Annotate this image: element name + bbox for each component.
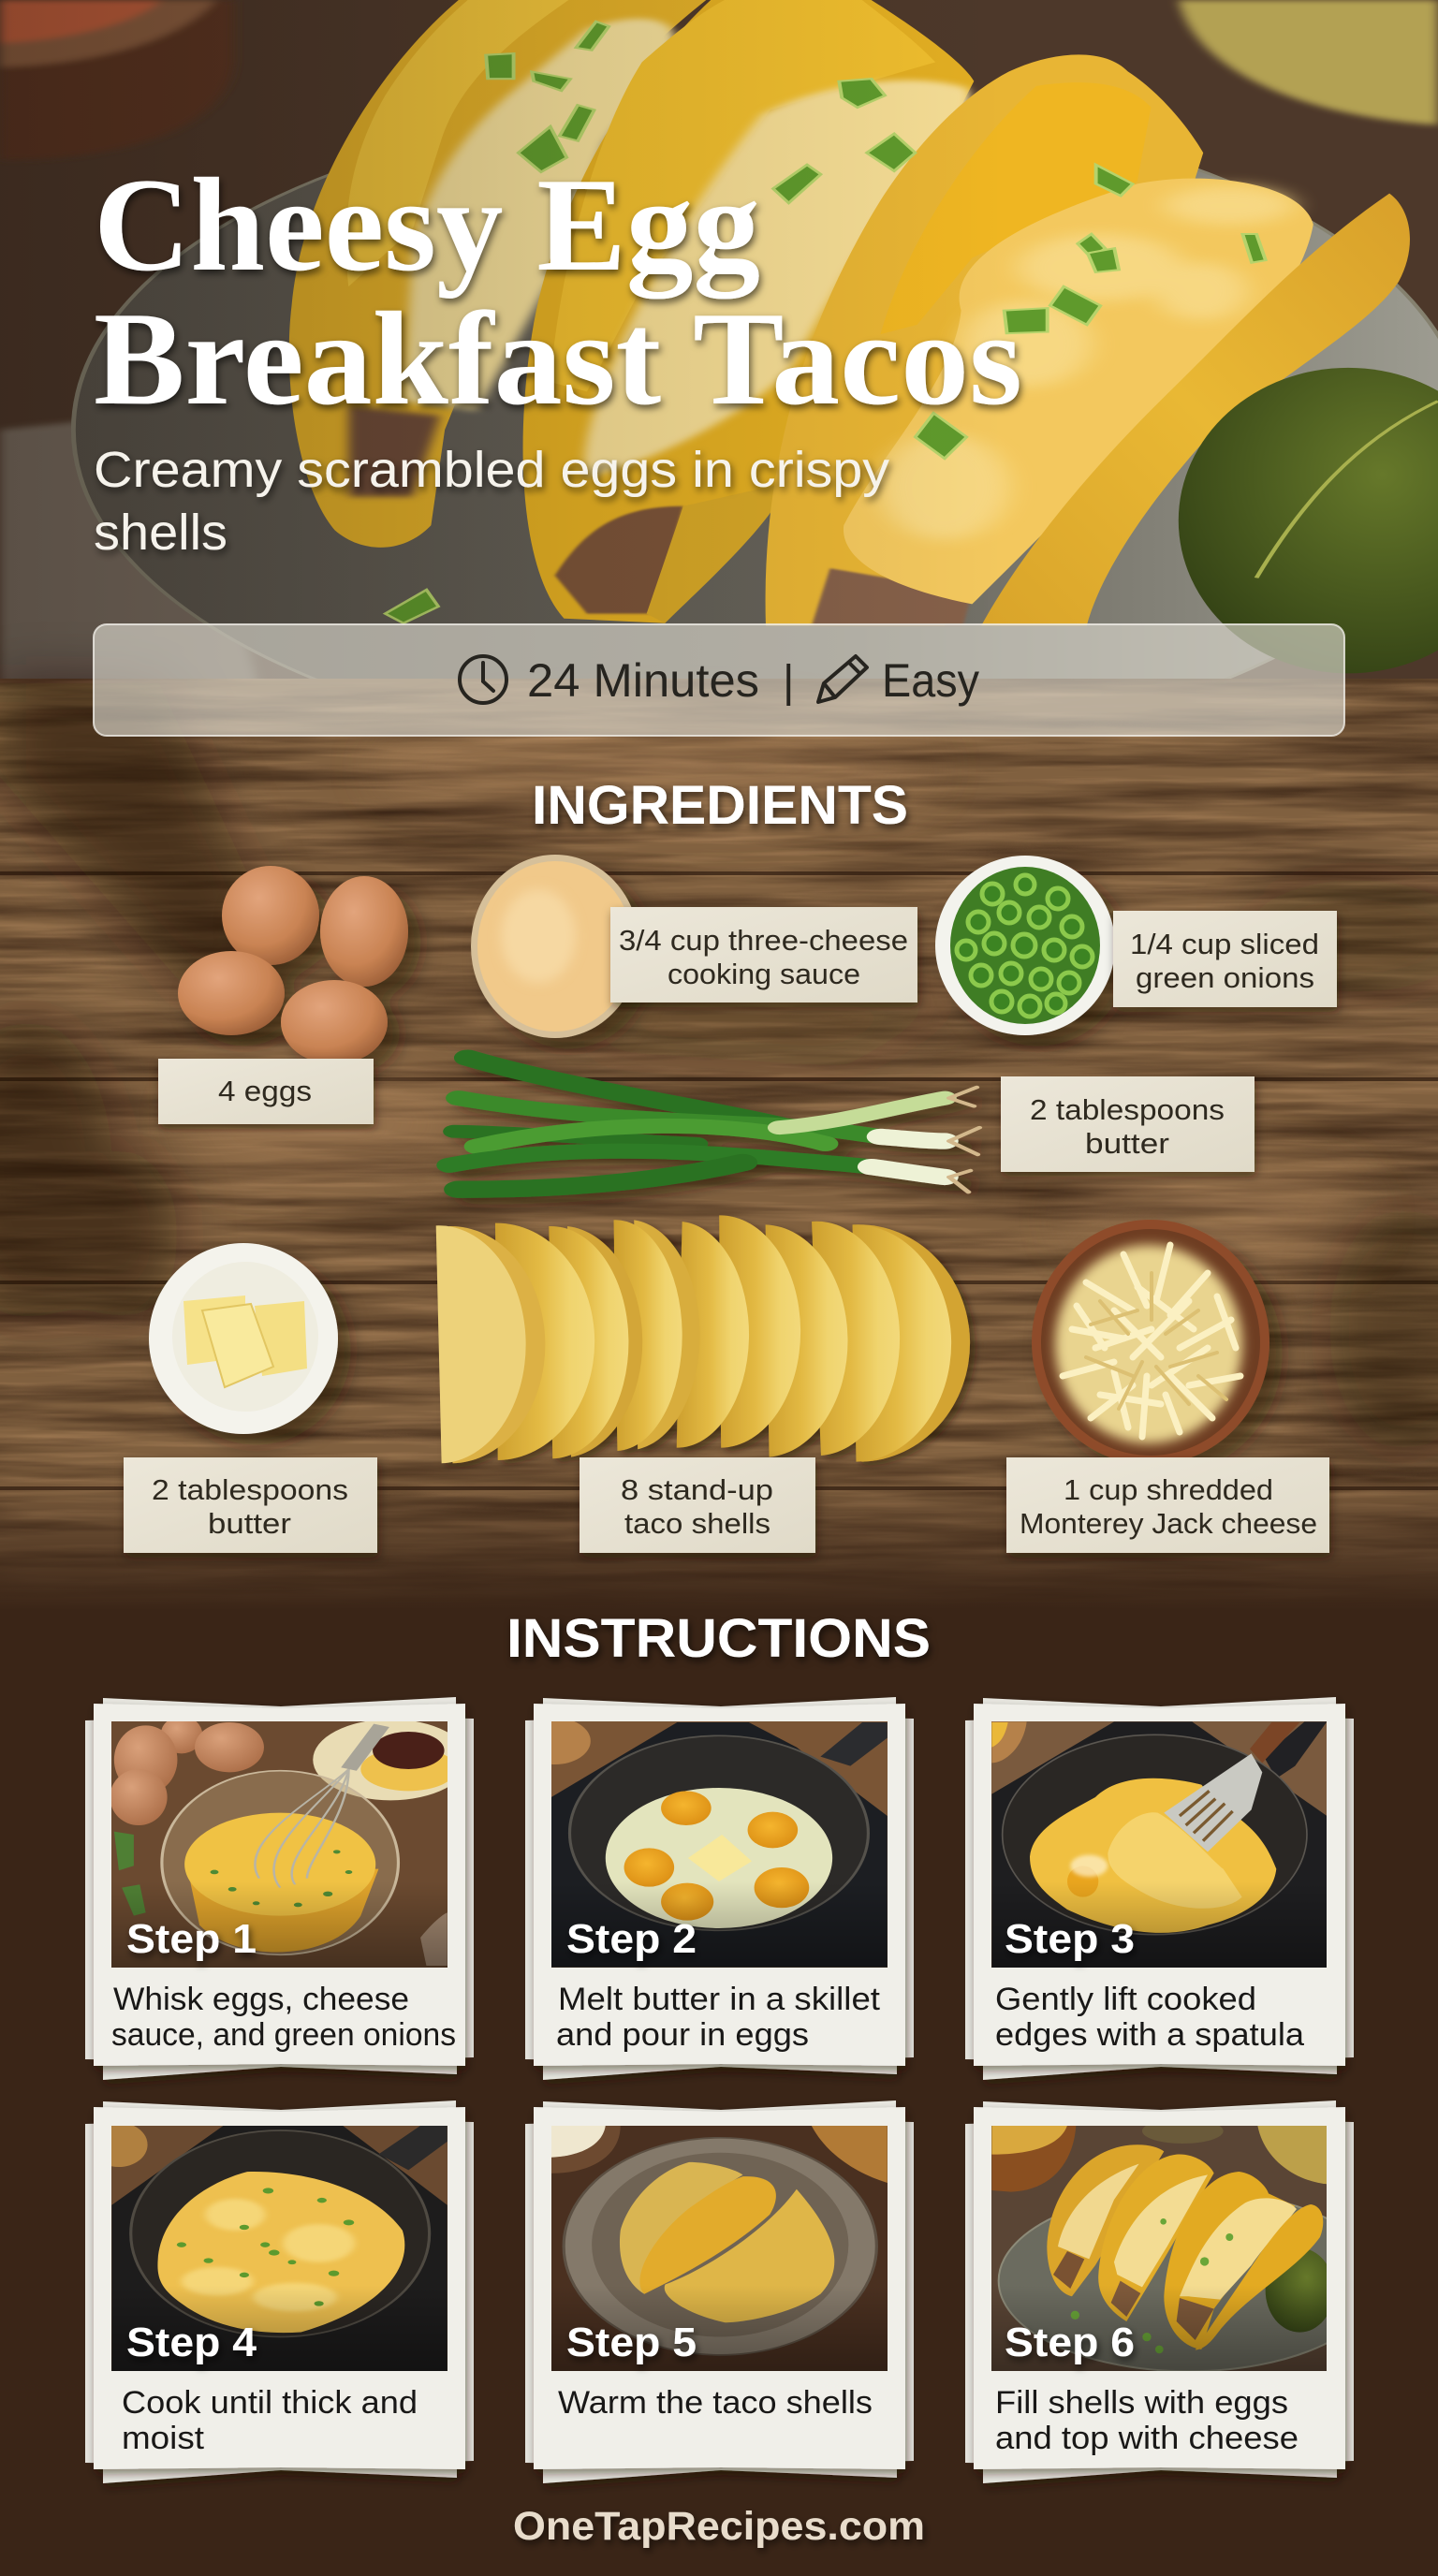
label: taco shells: taco shells xyxy=(624,1507,770,1540)
step description: Whisk eggs, cheese xyxy=(113,1982,409,2017)
step description: Melt butter in a skillet xyxy=(558,1982,881,2017)
icon: middle taco xyxy=(523,0,974,623)
wood table xyxy=(0,679,1438,1628)
label: butter lower xyxy=(124,1457,377,1553)
photo: filled tacos on plate xyxy=(991,2118,1379,2371)
step description xyxy=(995,1982,1304,2053)
left shading over hero xyxy=(0,0,854,679)
step label: Step 3 xyxy=(1005,1916,1135,1962)
step description: edges with a spatula xyxy=(995,2017,1304,2053)
title xyxy=(94,151,1022,432)
heading: instructions: INSTRUCTIONS xyxy=(506,1608,931,1669)
step description xyxy=(995,2385,1299,2456)
footer website: OneTapRecipes.com xyxy=(513,2504,925,2549)
label: eggs xyxy=(158,1059,374,1124)
step description: Gently lift cooked xyxy=(995,1982,1256,2017)
step description xyxy=(122,2385,418,2456)
separator: | xyxy=(783,657,794,707)
icon: stack of taco shells xyxy=(436,1215,970,1463)
icon: grey plate xyxy=(71,168,1438,679)
photo: thick scrambled eggs in skillet xyxy=(90,2123,448,2372)
label: cheese sauce: cooking sauce xyxy=(668,958,860,990)
label: green onions: green onions xyxy=(1136,961,1314,994)
subtitle: Creamy scrambled eggs in crispy xyxy=(94,442,889,498)
step card 4 xyxy=(85,2100,474,2483)
label: butter lower: butter xyxy=(208,1507,291,1540)
step description xyxy=(556,1982,881,2053)
label: green onions xyxy=(1113,911,1337,1007)
icon: lime xyxy=(1179,368,1438,673)
title: Cheesy Egg xyxy=(94,151,760,300)
label: butter upper xyxy=(1001,1076,1255,1172)
label: butter lower: 2 tablespoons xyxy=(152,1473,348,1506)
step description xyxy=(111,1982,456,2053)
hero photo: tacos on plate xyxy=(0,0,1438,679)
icon: eggs xyxy=(178,866,408,1064)
wood shadows and light xyxy=(0,683,1438,1451)
label: cheese sauce: 3/4 cup three-cheese xyxy=(619,924,908,957)
label: cheese xyxy=(1006,1457,1329,1553)
step description: and pour in eggs xyxy=(556,2017,809,2053)
plank seams xyxy=(0,873,1438,1488)
label: cheese: Monterey Jack cheese xyxy=(1020,1507,1317,1540)
icon: pencil xyxy=(818,656,867,702)
subtitle xyxy=(94,442,889,561)
step label: Step 2 xyxy=(566,1916,697,1962)
icon: back taco xyxy=(289,0,706,548)
photo: butter and eggs in skillet xyxy=(519,1718,888,1968)
icon: green onion flakes xyxy=(385,22,1266,623)
step description: Cook until thick and xyxy=(122,2385,418,2421)
step description: Fill shells with eggs xyxy=(995,2385,1288,2421)
time and difficulty banner xyxy=(94,624,1344,736)
step card 5 xyxy=(525,2100,914,2483)
step label: Step 4 xyxy=(126,2320,257,2365)
ingredient illustrations xyxy=(149,855,1269,1465)
subtitle: shells xyxy=(94,505,227,561)
label: cheese: 1 cup shredded xyxy=(1064,1473,1273,1506)
icon: yellow bowl top right xyxy=(1179,0,1438,125)
photo: warmed taco shells on plate xyxy=(551,2126,888,2371)
step label: Step 6 xyxy=(1005,2320,1135,2365)
photo: lifting eggs with spatula xyxy=(991,1721,1327,1968)
step description: sauce, and green onions xyxy=(111,2017,456,2053)
step card 6 xyxy=(965,2100,1379,2483)
icon: cheese sauce bowl xyxy=(471,855,639,1038)
step label: Step 5 xyxy=(566,2320,697,2365)
step description: and top with cheese xyxy=(995,2421,1299,2456)
step card 3 xyxy=(965,1697,1354,2080)
difficulty text: Easy xyxy=(882,654,979,707)
label: eggs: 4 eggs xyxy=(218,1075,312,1107)
label: taco shells xyxy=(580,1457,815,1553)
icon: blurred wooden table backdrop xyxy=(0,419,256,679)
heading: ingredients: INGREDIENTS xyxy=(532,775,908,836)
label: taco shells: 8 stand-up xyxy=(621,1473,773,1506)
step label: Step 1 xyxy=(126,1916,257,1962)
label: green onions: 1/4 cup sliced xyxy=(1130,928,1319,960)
step card 2 xyxy=(519,1697,914,2080)
label: butter upper: 2 tablespoons xyxy=(1030,1093,1225,1126)
step description: moist xyxy=(122,2421,205,2456)
icon: butter dish xyxy=(149,1243,338,1434)
title: Breakfast Tacos xyxy=(94,285,1022,432)
icon: clock xyxy=(460,656,506,703)
icon: front taco xyxy=(766,54,1410,625)
label: cheese sauce xyxy=(610,907,917,1003)
icon: whole green onions xyxy=(449,1058,979,1193)
time text: 24 Minutes xyxy=(527,654,759,707)
step description: Warm the taco shells xyxy=(558,2385,873,2421)
photo: whisking eggs xyxy=(110,1716,468,1968)
icon: salsa bowl top left xyxy=(0,0,234,160)
label: butter upper: butter xyxy=(1085,1127,1169,1160)
step card 1 xyxy=(85,1697,474,2080)
icon: shredded cheese bowl xyxy=(1032,1220,1269,1465)
icon: sliced green onions bowl xyxy=(935,856,1115,1035)
